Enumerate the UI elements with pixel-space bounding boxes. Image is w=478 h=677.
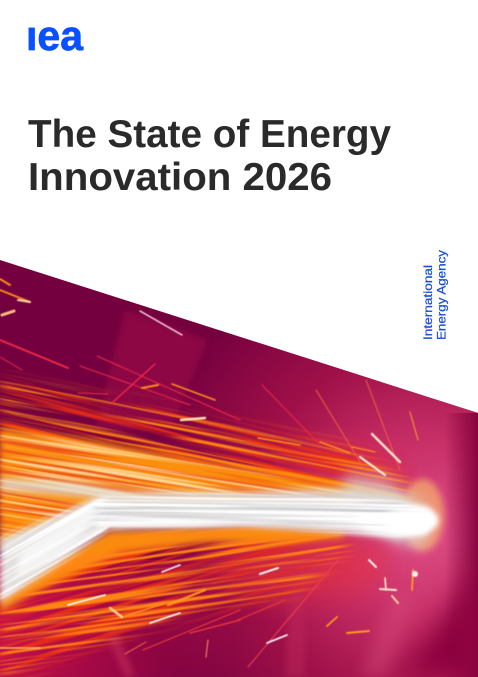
photo: sparks from grinding metal, cut by diagonal edge [0,260,478,677]
sparse red and orange fibres around the band [200,450,201,561]
logo: IEA: ıea [26,12,84,59]
title: The State of Energy [28,113,392,156]
title [28,113,392,199]
vertical label: International Energy Agency: International [422,265,435,340]
white spark core [0,474,444,603]
spark streaks: lower field [0,560,418,667]
spark streaks: upper field [0,279,418,475]
vertical label: International Energy Agency [422,250,448,340]
vertical label: International Energy Agency: Energy Agency [436,250,448,340]
orange spark bands [0,428,430,612]
title: Innovation 2026 [28,156,332,199]
photo background [0,260,478,677]
